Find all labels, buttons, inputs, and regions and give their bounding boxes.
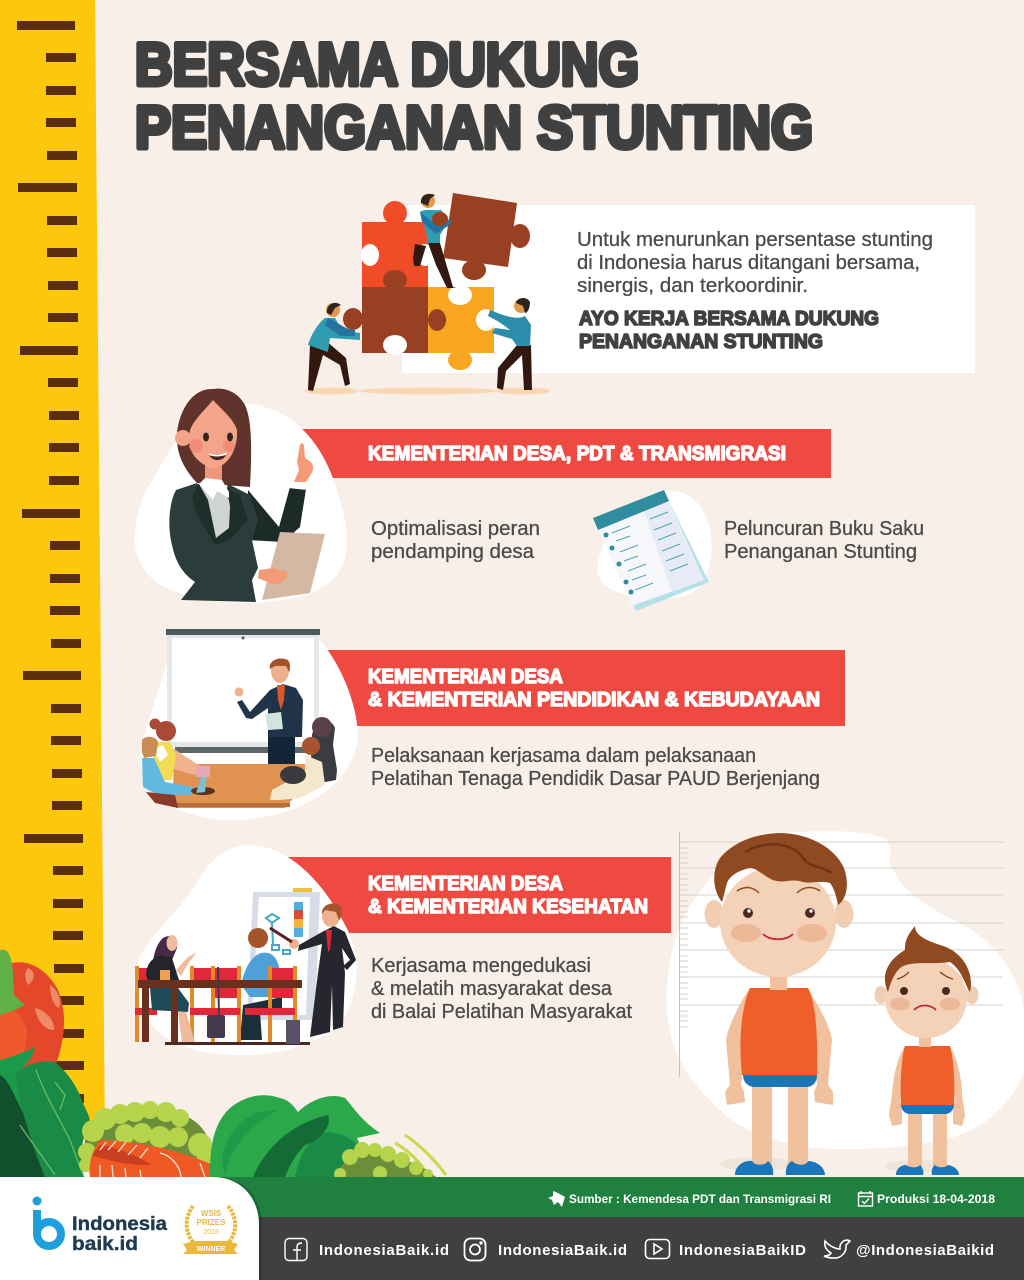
logo: indonesia baik: Indonesia [72, 1214, 167, 1235]
banner: kementerian pendidikan [320, 650, 845, 726]
text: pelaksanaan [371, 745, 820, 790]
badge: wsis prizes winner [183, 1206, 238, 1254]
twitter handle: @IndonesiaBaikid [856, 1242, 994, 1259]
illustration: vegetables and fish [0, 950, 446, 1180]
icon: classroom presentation on blob [142, 629, 358, 820]
icon: small broccoli [334, 1142, 436, 1180]
icon: facebook [285, 1238, 307, 1260]
badge: wsis prizes winner: WINNER [197, 1246, 225, 1253]
text: optimalisasi: Optimalisasi peran [371, 518, 540, 540]
panel: intro text: PENANGANAN STUNTING [579, 330, 823, 353]
banner: kementerian kesehatan: & KEMENTERIAN KESEHATAN [368, 895, 648, 918]
logo: indonesia baik: baik.id [72, 1234, 138, 1255]
table [138, 967, 310, 1045]
icon: broccoli [78, 1101, 213, 1172]
text: peluncuran buku: Peluncuran Buku Saku [724, 518, 924, 540]
icon: twitter [824, 1240, 850, 1258]
figure: presenter [234, 658, 303, 764]
banner: kementerian kesehatan: KEMENTERIAN DESA [368, 872, 563, 895]
figure: seated man [240, 928, 282, 1040]
icon: woman pointing on blob [135, 389, 347, 603]
icon: salmon [89, 1140, 236, 1177]
text: pelaksanaan: Pelaksanaan kerjasama dalam pelaksanaan [371, 745, 756, 767]
text: peluncuran buku [724, 518, 924, 563]
badge: wsis prizes winner: PRIZES [197, 1218, 226, 1227]
instagram handle: IndonesiaBaik.id [498, 1242, 627, 1259]
source text: Sumber : Kemendesa PDT dan Transmigrasi RI [569, 1192, 831, 1206]
banner: kementerian desa pdt [297, 429, 831, 478]
panel: intro text: di Indonesia harus ditangani bersama, [577, 252, 920, 274]
banner: kementerian desa pdt: KEMENTERIAN DESA, PDT & TRANSMIGRASI [368, 442, 786, 465]
title: PENANGANAN STUNTING [135, 94, 813, 161]
figure: man left [308, 303, 360, 391]
text: peluncuran buku: Penanganan Stunting [724, 541, 917, 563]
icon: youtube [646, 1240, 670, 1258]
illustration: children height comparison [667, 831, 1024, 1175]
youtube handle: IndonesiaBaikID [679, 1242, 806, 1259]
panel: intro text [402, 205, 975, 373]
flipboard [247, 888, 320, 1020]
panel: intro text: sinergis, dan terkoordinir. [577, 275, 808, 297]
figure: short stunted child [874, 926, 978, 1175]
icon: puzzle team [304, 193, 550, 394]
icon: instagram [464, 1238, 486, 1260]
figure: right attendees [270, 717, 337, 800]
text: kerjasama [371, 955, 632, 1023]
banner: kementerian pendidikan: & KEMENTERIAN PENDIDIKAN & KEBUDAYAAN [368, 688, 820, 711]
figure: tall healthy child [704, 833, 854, 1175]
icon: pepper [0, 950, 64, 1090]
title [135, 31, 813, 161]
icon: spinach [210, 1095, 380, 1177]
logo: indonesia baik [32, 1196, 167, 1255]
badge: wsis prizes winner: 2018 [203, 1229, 219, 1236]
icon: left leaves [0, 1047, 90, 1177]
icon: calendar [858, 1191, 872, 1206]
footer: dark social bar [0, 1217, 1024, 1280]
height chart lines [680, 832, 1003, 1077]
footer: white logo panel [0, 1177, 262, 1280]
text: pelaksanaan: Pelatihan Tenaga Pendidik Dasar PAUD Berjenjang [371, 768, 820, 790]
facebook handle: IndonesiaBaik.id [319, 1242, 449, 1259]
icon: team meeting on blob [134, 845, 356, 1055]
banner: kementerian kesehatan [287, 857, 671, 933]
icon: vegetable stalks [395, 1135, 446, 1175]
panel: intro text: AYO KERJA BERSAMA DUKUNG [579, 307, 879, 330]
figure: man right [488, 298, 532, 390]
icon: pocket book [593, 490, 712, 611]
icon: pin [548, 1191, 565, 1207]
figure: presenter [270, 903, 356, 1037]
panel: intro text: Untuk menurunkan persentase stunting [577, 229, 933, 251]
figure: seated woman [146, 935, 196, 1042]
title: BERSAMA DUKUNG [135, 31, 639, 98]
figure: man on top [413, 194, 456, 288]
text: optimalisasi [371, 518, 540, 563]
text: kerjasama: Kerjasama mengedukasi [371, 955, 591, 977]
text: kerjasama: di Balai Pelatihan Masyarakat [371, 1001, 632, 1023]
text: optimalisasi: pendamping desa [371, 541, 535, 563]
banner: kementerian pendidikan: KEMENTERIAN DESA [368, 665, 563, 688]
yellow measuring ruler [0, 0, 105, 1140]
badge: wsis prizes winner: WSIS [201, 1209, 222, 1218]
figure: left attendees [142, 718, 215, 808]
text: kerjasama: & melatih masyarakat desa [371, 978, 613, 1000]
footer: green source bar [0, 1177, 1024, 1217]
chairs and table behind woman [135, 966, 297, 1042]
production date: Produksi 18-04-2018 [877, 1192, 995, 1206]
